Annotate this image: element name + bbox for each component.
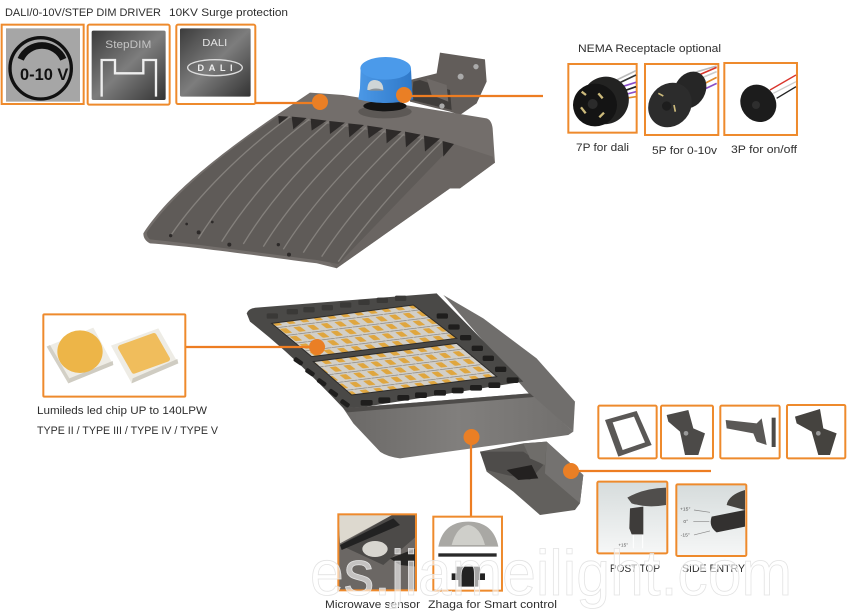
illustration: top of luminaire with photocell [143, 53, 495, 268]
panel: mounting bracket frame [598, 406, 657, 458]
panel: mounting arm C [787, 405, 845, 458]
callout: LED chip line and dot [186, 339, 325, 355]
icon: DALI [176, 25, 255, 104]
panel: 3P receptacle [724, 63, 797, 135]
panel: post top: +15° [618, 542, 628, 547]
watermark: es.jiameilight.com [310, 537, 792, 609]
icon: 0-10V dimming: 0-10 V [20, 65, 68, 84]
panel: LED chips [43, 314, 185, 397]
panel: post top [597, 482, 667, 553]
label: 5P: 5P for 0-10v [652, 145, 718, 157]
callout: Zhaga line and dot [464, 429, 480, 516]
icon: DALI: DALI [197, 63, 233, 73]
panel: side entry: -15° [681, 532, 690, 538]
label: side entry: SIDE ENTRY [682, 563, 746, 575]
text: LED chip description: Lumileds led chip UP to 140LPW [37, 405, 208, 417]
panel: side entry: 0° [683, 519, 688, 525]
panel: side entry: +15° [680, 507, 690, 513]
panel: mounting arm A [661, 406, 713, 458]
label: post top: POST TOP [610, 563, 660, 575]
panel: side entry [676, 484, 746, 556]
icon: StepDIM [88, 25, 170, 105]
callout: NEMA line and dot [396, 87, 543, 103]
callout: driver line and dot [255, 94, 328, 110]
panel: 7P receptacle [568, 64, 638, 133]
icon: 0-10V dimming [2, 25, 84, 104]
heading: surge protection: 10KV Surge protection [169, 7, 288, 19]
panel: Zhaga smart control [433, 517, 502, 591]
text: optic types: TYPE II / TYPE III / TYPE IV / TYPE V [37, 425, 219, 437]
heading: NEMA receptacle: NEMA Receptacle optional [578, 43, 721, 55]
panel: mounting arm B [720, 406, 780, 458]
label: 3P: 3P for on/off [731, 144, 798, 156]
label: microwave sensor: Microwave sensor [325, 599, 420, 611]
icon: StepDIM: StepDIM [105, 39, 151, 51]
icon: DALI: DALI [202, 38, 227, 49]
panel: microwave sensor [338, 514, 416, 590]
panel: 5P receptacle [639, 64, 718, 136]
illustration: underside of luminaire with LED modules [247, 293, 583, 515]
label: 7P: 7P for dali [576, 142, 629, 154]
callout: bracket line and dot [563, 463, 711, 479]
label: Zhaga: Zhaga for Smart control [428, 599, 557, 611]
heading: driver options: DALI/0-10V/STEP DIM DRIVER [5, 7, 161, 19]
